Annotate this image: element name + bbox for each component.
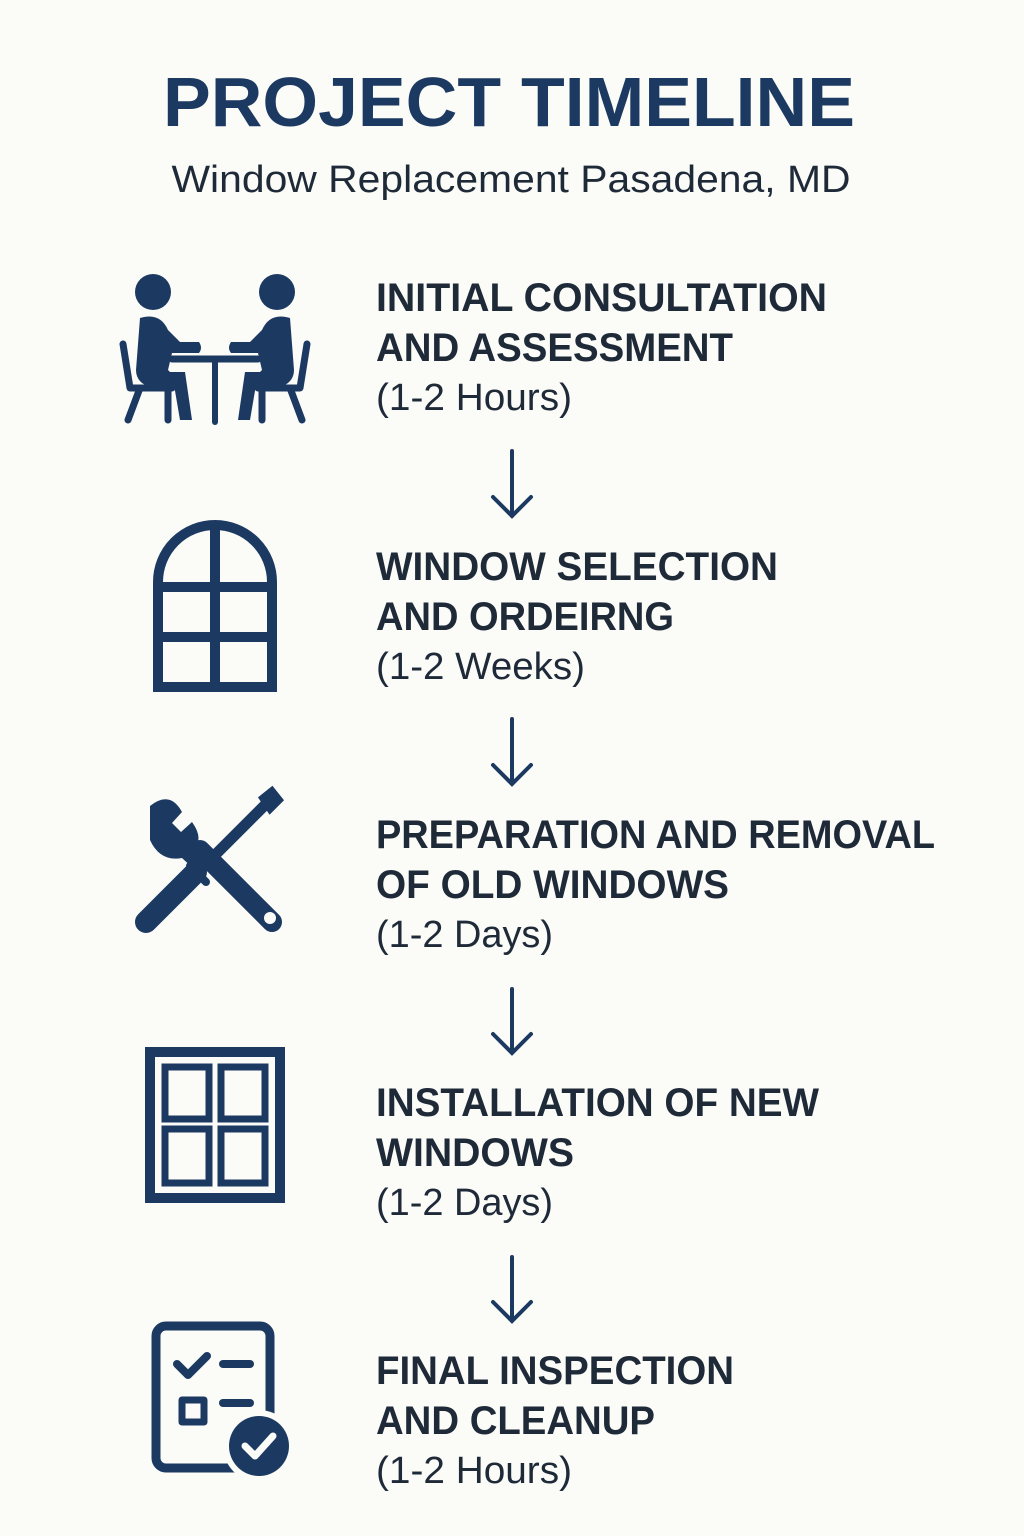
subtitle: Window Replacement Pasadena, MD <box>172 159 850 201</box>
step 3 text <box>376 813 935 956</box>
step 5 text: FINAL INSPECTION <box>376 1349 734 1393</box>
step 2 text: WINDOW SELECTION <box>376 545 778 589</box>
step 2 text: (1-2 Weeks) <box>376 646 585 688</box>
step 5 text <box>376 1349 734 1492</box>
step 1 text: INITIAL CONSULTATION <box>376 276 827 320</box>
arrow 3 <box>493 989 531 1053</box>
title: PROJECT TIMELINE <box>163 63 855 141</box>
step 1 text: (1-2 Hours) <box>376 377 572 419</box>
arrow 4 <box>493 1257 531 1321</box>
step 4 text: WINDOWS <box>376 1131 574 1175</box>
step 3 text: OF OLD WINDOWS <box>376 863 729 907</box>
icon: square window <box>150 1052 280 1198</box>
step 3 text: (1-2 Days) <box>376 914 553 956</box>
step 2 text <box>376 545 778 688</box>
icon: arched window <box>158 525 272 687</box>
step 5 text: (1-2 Hours) <box>376 1450 572 1492</box>
icon: tools <box>146 790 280 924</box>
step 4 text: INSTALLATION OF NEW <box>376 1081 819 1125</box>
step 2 text: AND ORDEIRNG <box>376 595 674 639</box>
step 5 text: AND CLEANUP <box>376 1399 655 1443</box>
step 1 text <box>376 276 827 419</box>
arrow 2 <box>493 719 531 784</box>
icon: consultation people at table <box>123 274 307 422</box>
arrow 1 <box>493 451 531 516</box>
step 1 text: AND ASSESSMENT <box>376 326 733 370</box>
step 4 text: (1-2 Days) <box>376 1182 553 1224</box>
step 4 text <box>376 1081 819 1224</box>
icon: checklist <box>156 1326 295 1482</box>
step 3 text: PREPARATION AND REMOVAL <box>376 813 935 857</box>
